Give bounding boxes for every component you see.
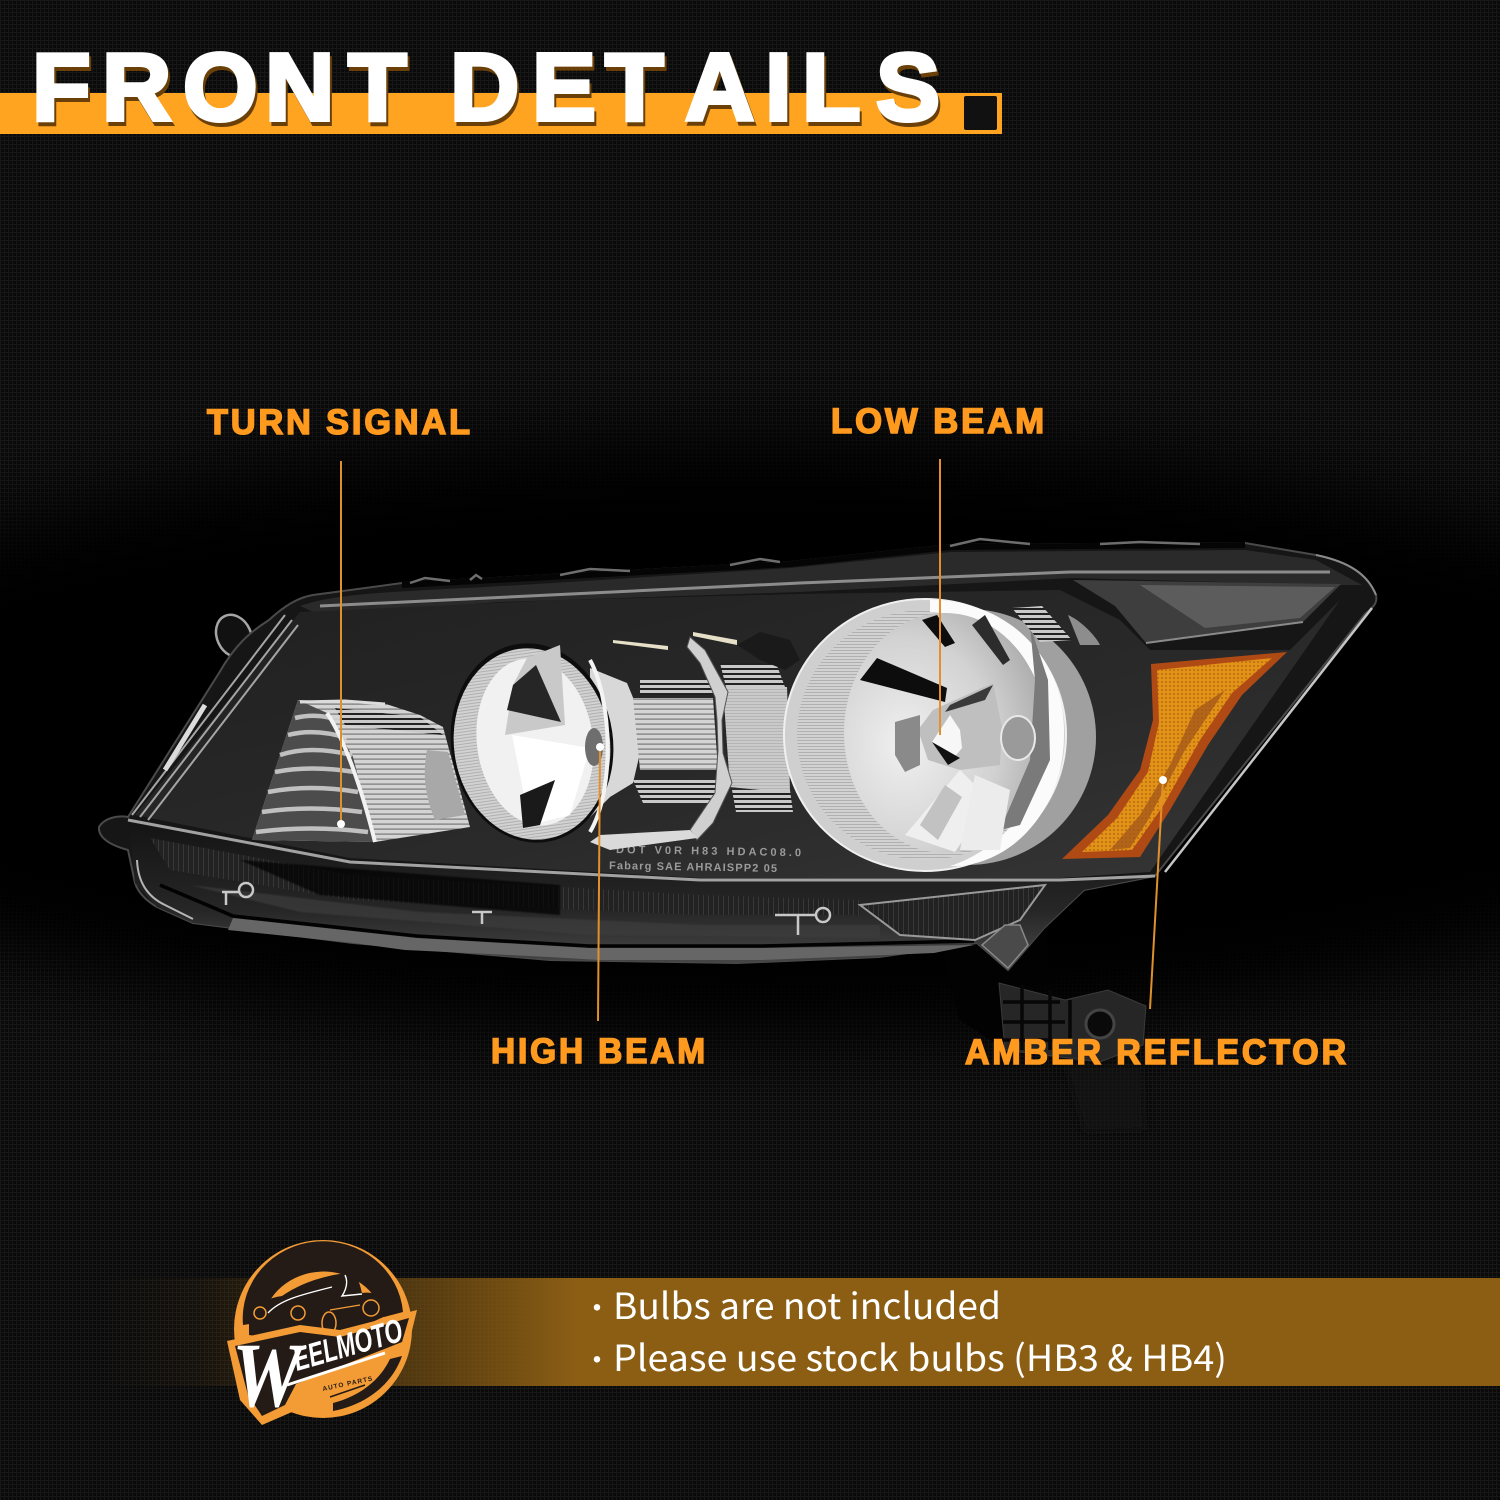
headlight xyxy=(99,539,1376,1132)
note: bulbs not included: Bulbs are not included xyxy=(613,1278,1001,1330)
lower lip xyxy=(128,820,1155,970)
note: bulbs not included: · xyxy=(582,1284,612,1328)
low beam leader xyxy=(939,459,941,735)
molded text xyxy=(609,844,801,875)
amber reflector leader xyxy=(1150,780,1163,1009)
top clip bumps xyxy=(410,539,1200,583)
logo: weelmoto: AUTO PARTS xyxy=(322,1375,374,1393)
note: stock bulbs: · xyxy=(582,1336,612,1380)
bulb notes xyxy=(582,1278,1227,1382)
amber reflector label: AMBER REFLECTOR xyxy=(965,1033,1349,1072)
logo wordmark: W xyxy=(232,1324,307,1426)
low beam white rim xyxy=(930,600,1064,866)
turn signal leader xyxy=(340,461,342,824)
molded text: Fabarg SAE AHRAISPP2 05 xyxy=(609,860,777,875)
low beam reflector xyxy=(784,599,1096,871)
top chrome highlights xyxy=(613,632,737,650)
mounting bracket reflection xyxy=(1065,1066,1145,1132)
title bar xyxy=(0,93,1002,134)
right ribs xyxy=(1012,606,1072,642)
bottom note band xyxy=(100,1278,1500,1386)
turn signal lens xyxy=(252,700,470,842)
logo banner xyxy=(227,1310,417,1425)
right edge highlight xyxy=(1165,608,1372,872)
callout: turn signal xyxy=(207,403,473,828)
callout: high beam xyxy=(491,743,708,1071)
logo car xyxy=(249,1273,390,1345)
halo behind high beam xyxy=(590,668,640,817)
high beam dot xyxy=(596,743,604,751)
title: front details xyxy=(0,34,1002,145)
inner black panel xyxy=(135,590,1340,878)
low beam label: LOW BEAM xyxy=(831,402,1047,441)
chrome dividers xyxy=(687,637,732,840)
upper clear corner lens xyxy=(1073,580,1341,643)
silver center block xyxy=(590,632,800,850)
title end square xyxy=(964,96,997,130)
lower lit flange xyxy=(228,918,974,960)
note: stock bulbs: Please use stock bulbs (HB3 & HB4) xyxy=(613,1330,1227,1382)
logo: weelmoto: EELMOTO xyxy=(289,1311,407,1378)
reflector dark wedges xyxy=(860,615,955,702)
small clips xyxy=(222,883,830,935)
high beam leader xyxy=(598,747,600,1021)
title shadow: FRONTDETAILS xyxy=(34,38,942,145)
high beam reflector xyxy=(438,633,626,853)
high beam label: HIGH BEAM xyxy=(491,1032,708,1071)
logo: weelmoto xyxy=(227,1240,417,1426)
left lens edge stripes xyxy=(132,615,298,820)
amber reflector lens xyxy=(1062,652,1287,859)
molded text: DOT V0R H83 HDAC08.0 xyxy=(616,844,801,859)
title text: FRONTDETAILS xyxy=(32,34,940,141)
top trim band xyxy=(300,550,1362,615)
callout: amber reflector xyxy=(965,776,1349,1072)
turn signal label: TURN SIGNAL xyxy=(207,403,473,442)
amber reflector dot xyxy=(1159,776,1167,784)
housing body xyxy=(99,543,1376,970)
bracket xyxy=(943,925,1146,1062)
center tab detail xyxy=(982,925,1028,968)
turn signal dot xyxy=(337,820,345,828)
logo disc xyxy=(234,1240,412,1418)
bottom chrome trim xyxy=(590,830,697,850)
ribbed blocks xyxy=(633,698,718,770)
logo lower crescent xyxy=(333,1356,402,1411)
top-left mounting tab xyxy=(209,609,259,663)
bulb xyxy=(918,683,1002,770)
